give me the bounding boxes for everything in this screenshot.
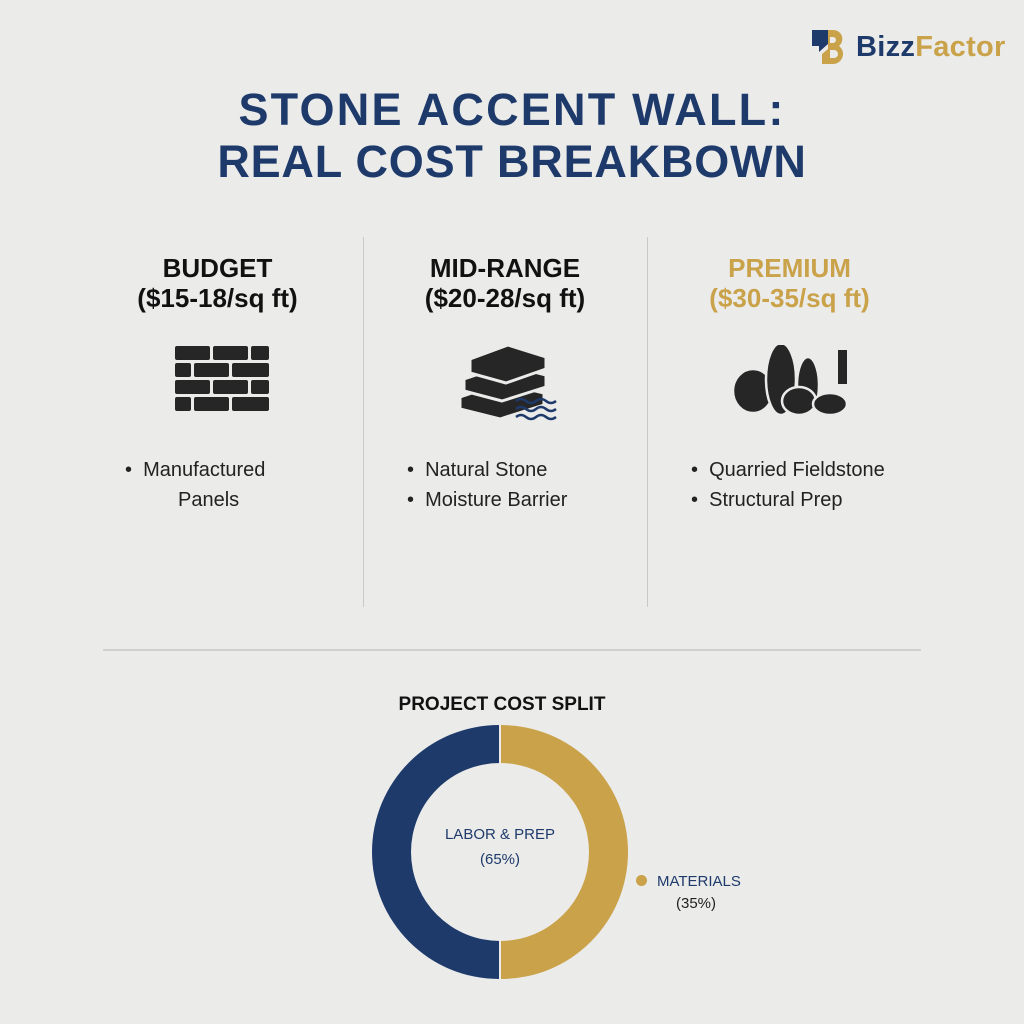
heading: mid-range: MID-RANGE xyxy=(430,253,580,283)
heading: mid-range xyxy=(425,253,585,313)
bullets: mid-range xyxy=(407,459,568,511)
bullets: budget: Panels xyxy=(178,489,239,511)
bullets: budget: • Manufactured xyxy=(125,459,265,481)
icon: fieldstones xyxy=(734,345,847,414)
bullets: mid-range: • Moisture Barrier xyxy=(407,489,567,511)
heading: mid-range: ($20-28/sq ft) xyxy=(425,283,585,313)
title xyxy=(217,84,807,187)
heading: premium xyxy=(709,253,870,313)
heading: budget: BUDGET xyxy=(163,253,272,283)
legend: materials: MATERIALS xyxy=(657,873,741,890)
title: STONE ACCENT WALL: xyxy=(238,84,786,135)
panel: budget xyxy=(125,253,298,511)
chart heading: PROJECT COST SPLIT xyxy=(399,694,605,715)
panel: premium xyxy=(691,253,885,511)
icon: stone slabs xyxy=(461,346,557,420)
center label: LABOR & PREP xyxy=(445,826,555,843)
legend: materials: (35%) xyxy=(676,895,716,912)
logo: BizzFactor xyxy=(856,31,1006,63)
heading: budget xyxy=(137,253,298,313)
heading: budget: ($15-18/sq ft) xyxy=(137,283,298,313)
legend: materials xyxy=(636,873,741,912)
bullets: premium xyxy=(691,459,885,511)
heading: premium: PREMIUM xyxy=(728,253,851,283)
bullets: budget xyxy=(125,459,265,511)
bullets: premium: • Quarried Fieldstone xyxy=(691,459,885,481)
panel: mid-range xyxy=(407,253,585,511)
donut chart xyxy=(372,725,741,979)
bullets: mid-range: • Natural Stone xyxy=(407,459,547,481)
heading: premium: ($30-35/sq ft) xyxy=(709,283,870,313)
center label: (65%) xyxy=(480,851,520,868)
center label xyxy=(445,826,555,868)
icon: bricks xyxy=(175,346,269,411)
title: REAL COST BREAKBOWN xyxy=(217,136,807,187)
bullets: premium: • Structural Prep xyxy=(691,489,843,511)
